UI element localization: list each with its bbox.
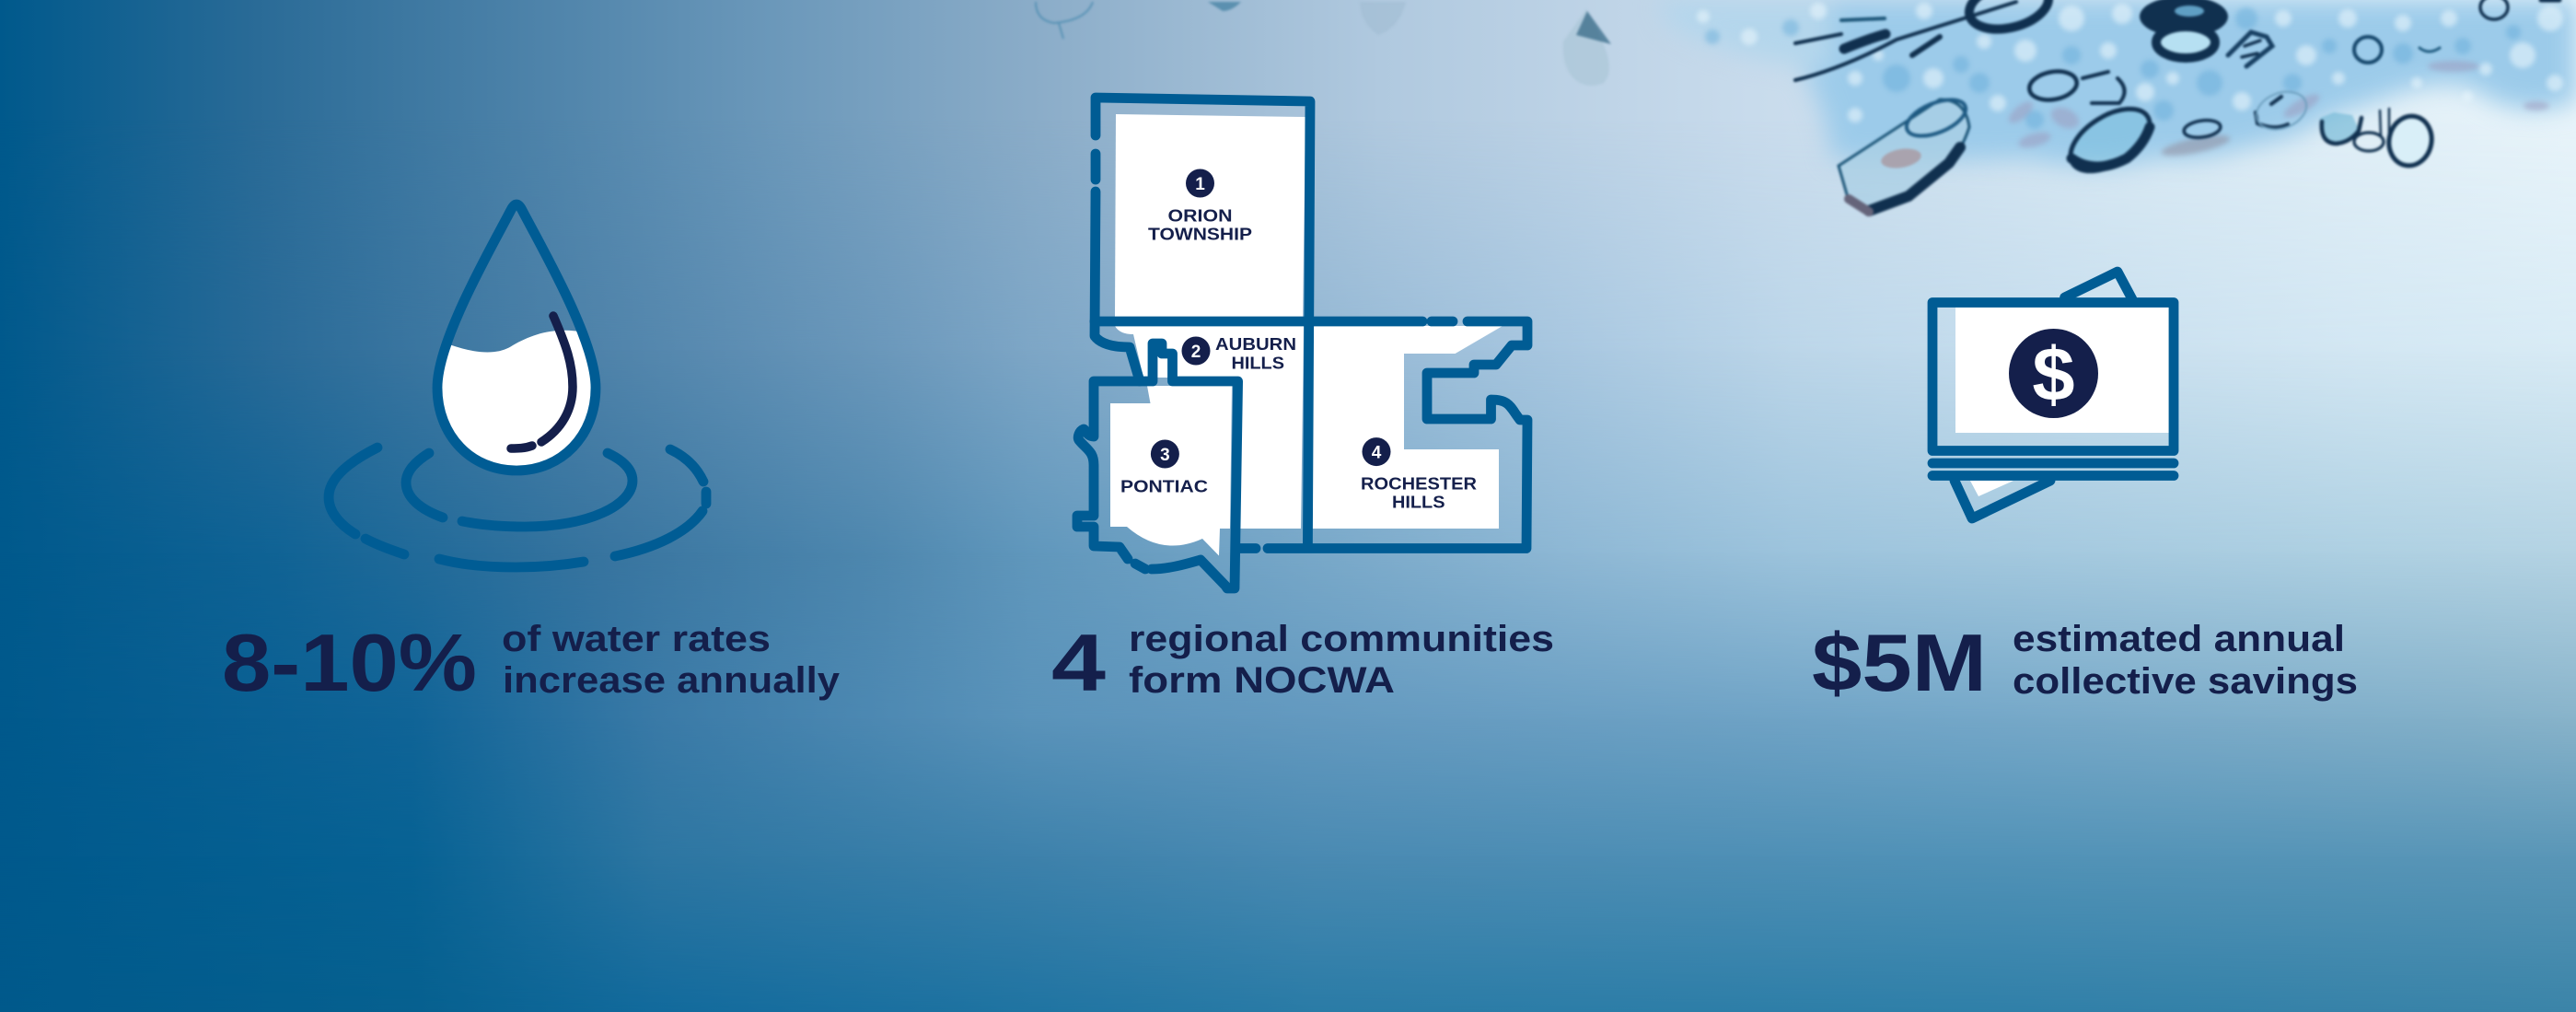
back bill [1955,272,2132,518]
stat: $5M estimated annual collective savings: $5M [1812,617,1987,708]
inner ripple [406,453,632,527]
marker 2 Auburn Hills: AUBURN [1215,335,1296,354]
stat: 4 regional communities form NOCWA [1051,617,1554,708]
lower-right bubble cluster [2320,112,2359,144]
marker 4 Rochester Hills: ROCHESTER [1361,475,1477,494]
map white fills [1110,114,1503,556]
marker 4 Rochester Hills: HILLS [1392,494,1445,512]
large capsule bubble [1839,99,1969,212]
dark bubble rims [1795,0,2559,212]
back bill white corner [1970,481,2013,496]
front bill outline [1932,302,2174,451]
stat: 4 regional communities form NOCWA: form NOCWA [1129,660,1395,701]
stat: 8-10% of water rates increase annually [222,617,841,708]
stat: $5M estimated annual collective savings: estimated annual [2013,619,2345,659]
marker 1 Orion Township: 1 [1195,175,1205,194]
dollar coin: $ [2032,332,2075,417]
drop highlight [511,316,573,448]
marker 1 Orion Township: TOWNSHIP [1148,225,1252,243]
bubble cloud [1657,0,2576,167]
marker 1 Orion Township [1148,169,1252,243]
stat: 4 regional communities form NOCWA: regional communities [1129,619,1554,659]
stat: 8-10% of water rates increase annually: of water rates [502,619,771,659]
water bubbles photo [1036,0,2576,212]
front bill face [1955,308,2169,433]
icon: stack of dollar bills [1932,272,2174,518]
stat: 8-10% of water rates increase annually: increase annually [503,660,841,701]
dark top blob [2140,0,2228,37]
stat: 4 regional communities form NOCWA: 4 [1051,617,1106,708]
stray drops [1036,2,1611,86]
stat: $5M estimated annual collective savings: collective savings [2013,661,2358,702]
marker 2 Auburn Hills: HILLS [1232,354,1284,372]
marker 3 Pontiac: 3 [1160,446,1170,465]
map outlines [1077,98,1527,588]
icon: water drop with ripples [329,204,706,567]
top ring bubble [1965,0,2053,37]
marker 2 Auburn Hills [1182,335,1296,372]
mottled bubbles [1697,3,2563,160]
marker 4 Rochester Hills: 4 [1372,444,1382,463]
map of NOCWA communities [1077,98,1527,588]
drop water fill [442,330,591,466]
stat: 8-10% of water rates increase annually: 8-10% [222,617,477,708]
diagonal streaks [1795,2,2016,80]
marker 3 Pontiac: PONTIAC [1120,477,1208,495]
marker 2 Auburn Hills: 2 [1191,343,1201,362]
marker 4 Rochester Hills [1361,437,1477,512]
ring bubbles [2027,68,2079,103]
dollar coin [2009,329,2098,418]
outer ripple [329,448,706,567]
drop outline [437,204,596,471]
marker 1 Orion Township: ORION [1167,206,1232,225]
stat: $5M estimated annual collective savings [1812,617,2358,708]
stacked bill lines [1932,463,2174,475]
marker 3 Pontiac [1120,440,1208,495]
